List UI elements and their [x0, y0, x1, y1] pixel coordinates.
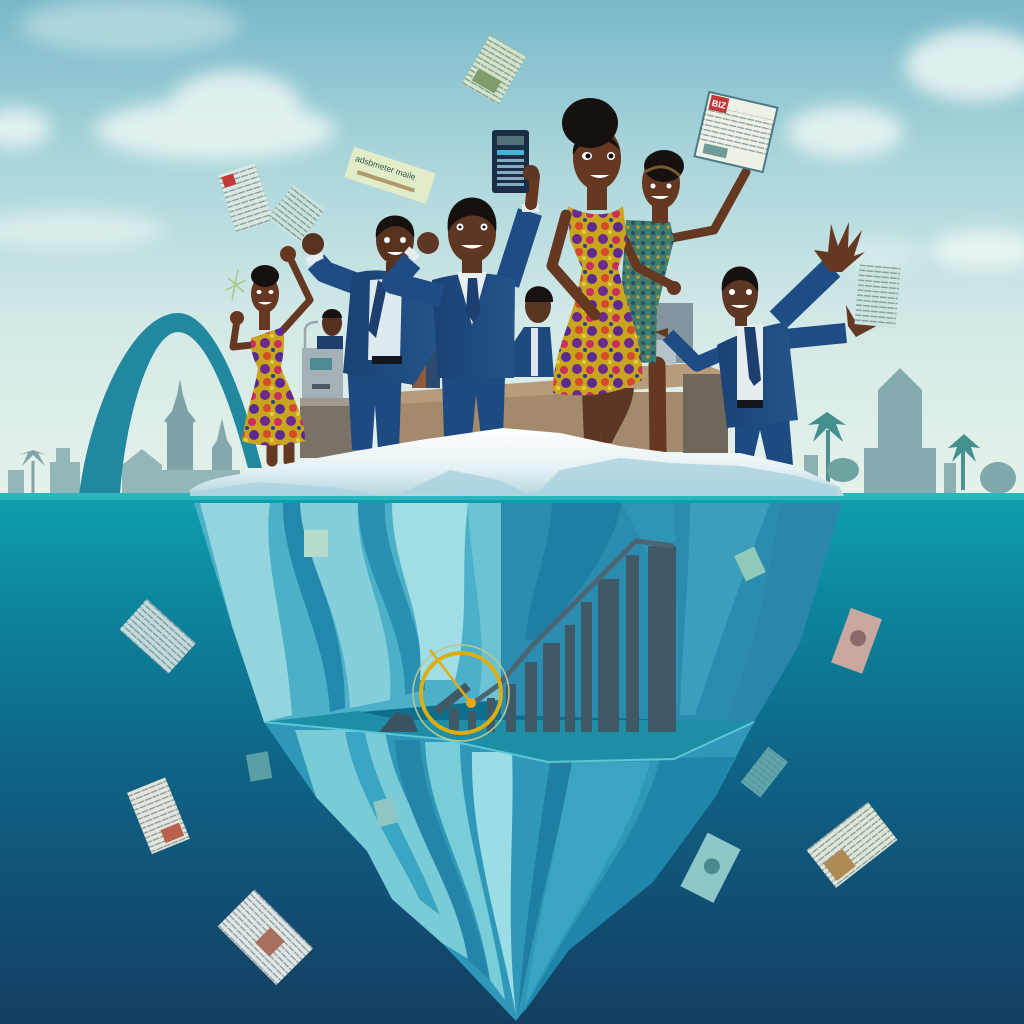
man on the right with raised hands: [655, 222, 884, 465]
sprig: [226, 270, 246, 300]
paper: top: [462, 35, 526, 105]
underwater paper 6: [680, 833, 741, 903]
paper: banknote with text: adsbmeter maile: [354, 153, 417, 182]
calculator: [492, 130, 529, 193]
arms: [778, 268, 832, 320]
office machine left: [302, 322, 343, 398]
arm behind: [620, 230, 673, 286]
gauge: [413, 645, 509, 741]
underwater paper 9: [373, 797, 399, 827]
raised arm: [316, 262, 365, 287]
chart debris: [379, 712, 418, 732]
jacket: [717, 322, 798, 428]
bar chart under ice: [379, 541, 676, 732]
underwater paper 10: [304, 530, 328, 557]
arm front: [552, 215, 595, 315]
upper ice left: [194, 503, 501, 722]
legs: [272, 440, 289, 461]
gateway arch: [79, 313, 262, 494]
underwater paper 8: [246, 751, 272, 782]
underwater paper 4: [806, 802, 898, 888]
paper: book held high: [694, 92, 778, 172]
paper: banknote with text: [344, 147, 436, 204]
woman in patterned dress, left: [226, 246, 310, 461]
bent arm: [393, 261, 442, 296]
person in background right: [512, 286, 554, 377]
underwater paper 3: [127, 778, 190, 854]
underwater iceberg: [194, 503, 842, 1021]
ledge: [264, 711, 754, 762]
upper ice right: [501, 503, 842, 722]
upper ice streaks: [200, 503, 842, 722]
paper: book held high: BIZ: [711, 98, 728, 111]
jacket: [432, 273, 515, 378]
underwater paper 2: [831, 608, 882, 674]
underwater paper 5: [218, 890, 313, 985]
snow shading: [190, 458, 840, 496]
computer right: [652, 303, 693, 364]
paper: left: [218, 163, 273, 232]
man with raised fist: [302, 216, 438, 450]
woman with green dress and raised book: [622, 150, 746, 450]
floating papers above the iceberg: [218, 35, 901, 328]
person in background centre: [412, 326, 440, 388]
underwater paper 1: [119, 599, 196, 674]
city skyline left: [8, 379, 240, 493]
sky background: [0, 0, 1024, 498]
arms: [233, 258, 310, 347]
sea: [0, 495, 1024, 1024]
underwater paper 11: [734, 547, 766, 581]
raised arm: [507, 212, 530, 284]
waterline: [0, 493, 1024, 500]
trousers: [442, 377, 505, 437]
paper: held right: [854, 264, 901, 328]
legs: [582, 388, 634, 443]
dress: [242, 327, 305, 446]
paper: second: [268, 185, 325, 243]
clouds: [0, 0, 1024, 275]
trend line: [472, 541, 674, 704]
dress: [553, 206, 642, 395]
papers floating under water: [119, 530, 898, 985]
lower ice streaks: [295, 730, 735, 1015]
snow top of iceberg: [190, 428, 844, 496]
hands: [655, 222, 884, 338]
lower ice: [264, 722, 754, 1021]
jacket: [343, 270, 438, 385]
trousers: [347, 363, 402, 450]
trousers: [735, 405, 793, 465]
man in the centre with calculator: [393, 130, 539, 437]
underwater paper 7: [741, 747, 788, 798]
city skyline right: [804, 368, 1016, 494]
tall woman in patterned dress: [552, 98, 681, 443]
desk: [300, 363, 728, 458]
person in background left: [317, 309, 343, 349]
